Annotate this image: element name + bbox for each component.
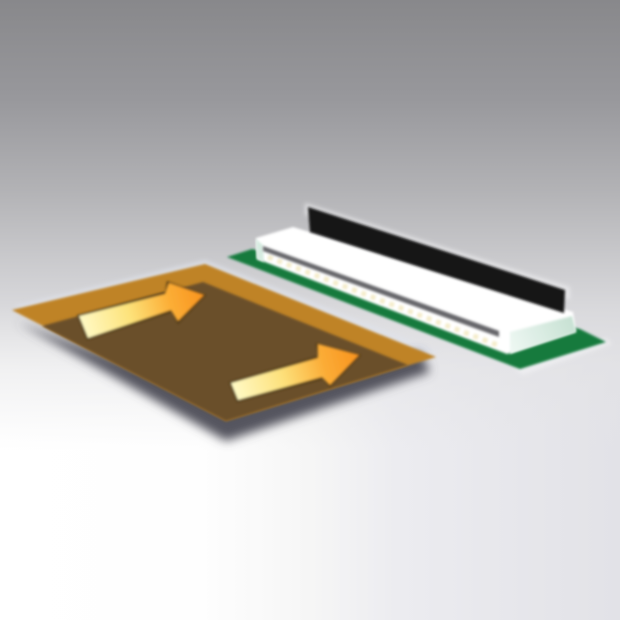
sheet orange border: [12, 264, 436, 421]
flexible printed circuit sheet: [12, 260, 440, 441]
arrow: upper: [77, 281, 206, 340]
board halo: [515, 338, 612, 375]
white connector body: [256, 227, 576, 354]
body front face: [510, 316, 576, 354]
body left end: [256, 239, 264, 262]
sheet top edge highlight: [14, 260, 440, 352]
arrow: lower: [229, 343, 361, 402]
board-to-FPC connector: [227, 203, 612, 375]
actuator halo: [305, 203, 570, 300]
sheet dark centre: [42, 282, 408, 421]
insertion slot: [263, 246, 499, 337]
black actuator: [308, 207, 565, 313]
green circuit board: [227, 249, 606, 369]
sheet drop shadow: [18, 322, 430, 441]
contact pins row: [268, 257, 500, 346]
